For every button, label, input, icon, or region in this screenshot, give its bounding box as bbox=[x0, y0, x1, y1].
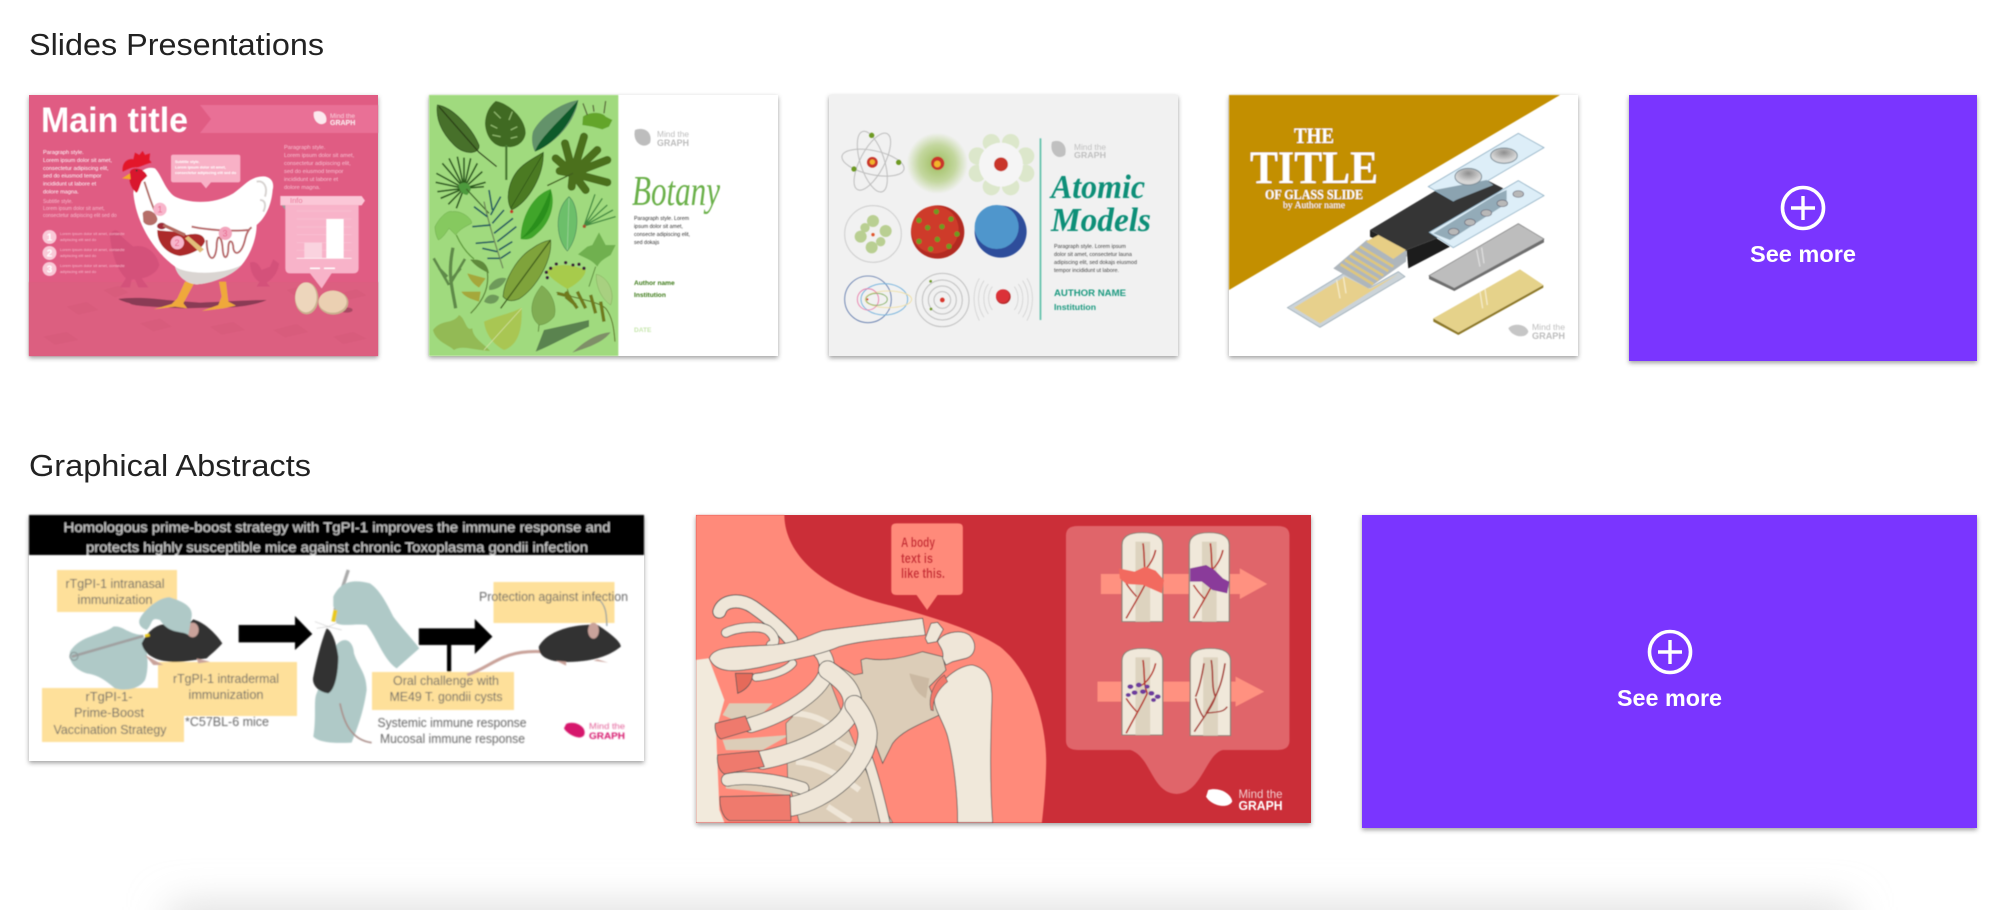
paragraph left: consectetur adipiscing elit, bbox=[43, 166, 109, 172]
logo: chicken slide: Mind the bbox=[330, 113, 355, 120]
numbered list: Lorem ipsum dolor sit amet, consecte bbox=[60, 263, 125, 268]
logo: atomic bbox=[1051, 141, 1107, 160]
panel: botany slide bbox=[429, 95, 778, 356]
box labels: rTgPI-1 intradermal bbox=[173, 672, 279, 686]
logo: botany: Mind the bbox=[657, 129, 689, 139]
paragraph right: Lorem ipsum dolor sit amet, bbox=[284, 153, 355, 159]
panel: atomic models slide bbox=[829, 95, 1178, 356]
paragraph right: consectetur adipiscing elit, bbox=[284, 161, 351, 167]
list bullets bbox=[42, 230, 56, 276]
box labels: Prime-Boost bbox=[74, 706, 145, 720]
box labels: immunization bbox=[188, 688, 264, 702]
paragraph left: dolore magna. bbox=[43, 190, 79, 196]
list numbers: 3 bbox=[47, 264, 53, 276]
card title: The Title of Glass Slide: OF GLASS SLIDE bbox=[1265, 188, 1363, 203]
free labels: Mucosal immune response bbox=[380, 732, 525, 746]
logo text: glass: GRAPH bbox=[1532, 331, 1565, 341]
author: AUTHOR NAME bbox=[1054, 288, 1126, 298]
numbered list: Lorem ipsum dolor sit amet, consecte bbox=[60, 231, 125, 236]
panel: shoulder abstract bbox=[696, 515, 1311, 827]
paragraph right bbox=[284, 145, 355, 191]
panel: chicken slide bbox=[29, 95, 378, 356]
box labels: rTgPI-1 intranasal bbox=[66, 577, 164, 591]
paragraph left bbox=[43, 150, 112, 196]
free labels: *C57BL-6 mice bbox=[185, 715, 269, 729]
numbered list: adipiscing elit sed do bbox=[60, 269, 96, 274]
card title: Atomic Models: Models bbox=[1050, 202, 1151, 239]
paragraph: tempor incididunt ut labore. bbox=[1054, 268, 1119, 274]
header text: Homologous prime-boost strategy with TgPI-1 improves the immune response and bbox=[64, 519, 610, 535]
card title: The Title of Glass Slide: by Author name bbox=[1283, 200, 1345, 210]
callout text: text is bbox=[901, 551, 933, 566]
callout text: Lorem ipsum dolor sit amet, bbox=[175, 166, 226, 170]
chart title: Info bbox=[290, 196, 303, 205]
panel: see more abstracts bbox=[1362, 515, 1977, 828]
paragraph left: incididunt ut labore et bbox=[43, 182, 97, 188]
paragraph left: sed do eiusmod tempor bbox=[43, 174, 102, 180]
panel: toxoplasma abstract bbox=[29, 515, 644, 761]
logo: chicken slide bbox=[314, 111, 355, 127]
free labels: Systemic immune response bbox=[378, 716, 527, 730]
box labels: ME49 T. gondii cysts bbox=[390, 690, 502, 704]
box labels: Oral challenge with bbox=[393, 674, 499, 688]
logo text: shoulder: GRAPH bbox=[1238, 799, 1282, 813]
card title: Atomic Models bbox=[1049, 169, 1151, 239]
icon: plus circle bbox=[1782, 188, 1824, 228]
logo: chicken slide: GRAPH bbox=[330, 120, 355, 127]
paragraph bbox=[634, 216, 690, 246]
box labels: immunization bbox=[78, 593, 153, 607]
list numbers: 2 bbox=[47, 248, 53, 260]
box labels: rTgPI-1- bbox=[86, 690, 132, 704]
paragraph: Paragraph style. Lorem ipsum bbox=[1054, 244, 1126, 250]
numbered list bbox=[60, 231, 125, 274]
diagram numbers: 3 bbox=[222, 228, 228, 238]
heading: Graphical Abstracts: Graphical Abstracts bbox=[29, 448, 311, 483]
box labels: Vaccination Strategy bbox=[54, 723, 167, 737]
logo text: shoulder bbox=[1238, 787, 1283, 813]
free labels bbox=[185, 590, 628, 746]
panel: glass slide bbox=[1229, 95, 1578, 356]
callout text bbox=[901, 535, 945, 581]
callout text: Subtitle style. bbox=[175, 160, 200, 164]
paragraph right: sed do eiusmod tempor bbox=[284, 169, 344, 175]
card title: The Title of Glass Slide: THE bbox=[1294, 123, 1334, 148]
logo text: toxoplasma: GRAPH bbox=[589, 731, 625, 742]
paragraph bbox=[1054, 244, 1137, 274]
paragraph: ipsum dolor sit amet, bbox=[634, 224, 683, 230]
see more label: See more bbox=[1750, 241, 1856, 267]
logo text: shoulder: Mind the bbox=[1238, 787, 1283, 801]
paragraph right: dolore magna. bbox=[284, 185, 321, 191]
subtitle left bbox=[43, 199, 117, 219]
logo text: toxoplasma: Mind the bbox=[589, 721, 625, 731]
subtitle left: Subtitle style. bbox=[43, 199, 73, 205]
logo: botany bbox=[634, 129, 689, 148]
list numbers: 1 bbox=[47, 232, 53, 244]
card title: The Title of Glass Slide bbox=[1250, 123, 1378, 210]
free labels: Protection against infection bbox=[479, 590, 628, 604]
author: Author name bbox=[634, 280, 675, 287]
paragraph right: Paragraph style. bbox=[284, 145, 326, 151]
diagram numbers: 2 bbox=[174, 238, 180, 248]
bottom page shadow bbox=[170, 906, 1850, 910]
institution: Institution bbox=[1054, 303, 1096, 312]
diagram numbers bbox=[157, 204, 228, 248]
numbered list: Lorem ipsum dolor sit amet, consecte bbox=[60, 247, 125, 252]
logo text: glass bbox=[1532, 323, 1566, 341]
logo: atomic: Mind the bbox=[1074, 143, 1107, 152]
header text bbox=[64, 519, 610, 555]
paragraph left: Lorem ipsum dolor sit amet, bbox=[43, 158, 112, 164]
paragraph: Paragraph style. Lorem bbox=[634, 216, 690, 222]
callout text: consectetur adipiscing elit sed do bbox=[175, 171, 237, 175]
paragraph: adipiscing elit, sed dokajs eiusmod bbox=[1054, 260, 1137, 266]
author bbox=[634, 280, 675, 299]
paragraph: dolor sit amet, consectetur launa bbox=[1054, 252, 1132, 258]
list numbers bbox=[47, 232, 53, 276]
card title: The Title of Glass Slide: TITLE bbox=[1250, 142, 1378, 194]
header text: protects highly susceptible mice against chronic Toxoplasma gondii infection bbox=[86, 539, 588, 555]
callout text: A body bbox=[901, 535, 935, 550]
card title: Botany: Botany bbox=[632, 169, 720, 215]
paragraph right: incididunt ut labore et bbox=[284, 177, 338, 183]
callout text: like this. bbox=[901, 566, 945, 581]
card title: Atomic Models: Atomic bbox=[1049, 169, 1145, 206]
subtitle left: Lorem ipsum dolor sit amet, bbox=[43, 206, 105, 212]
paragraph: consecte adipiscing elit, bbox=[634, 232, 690, 238]
paragraph left: Paragraph style. bbox=[43, 150, 84, 156]
logo text: glass: Mind the bbox=[1532, 323, 1566, 332]
diagram numbers: 1 bbox=[157, 204, 163, 214]
date: DATE bbox=[634, 327, 652, 334]
card title: Main title: Main title bbox=[41, 101, 188, 140]
paragraph: sed dokajs bbox=[634, 240, 660, 246]
subtitle left: consectetur adipiscing elit sed do bbox=[43, 213, 117, 219]
author: Institution bbox=[634, 292, 666, 299]
box labels bbox=[54, 577, 502, 737]
callout text bbox=[175, 160, 237, 175]
logo: botany: GRAPH bbox=[657, 138, 689, 148]
numbered list: adipiscing elit sed do bbox=[60, 253, 96, 258]
logo: atomic: GRAPH bbox=[1074, 150, 1106, 160]
heading: Slides Presentations: Slides Presentations bbox=[29, 27, 324, 62]
panel: see more slides bbox=[1629, 95, 1977, 361]
see more label: See more bbox=[1617, 685, 1722, 711]
logo text: toxoplasma bbox=[589, 721, 625, 742]
numbered list: adipiscing elit sed do bbox=[60, 237, 96, 242]
icon: plus circle bbox=[1650, 632, 1690, 672]
